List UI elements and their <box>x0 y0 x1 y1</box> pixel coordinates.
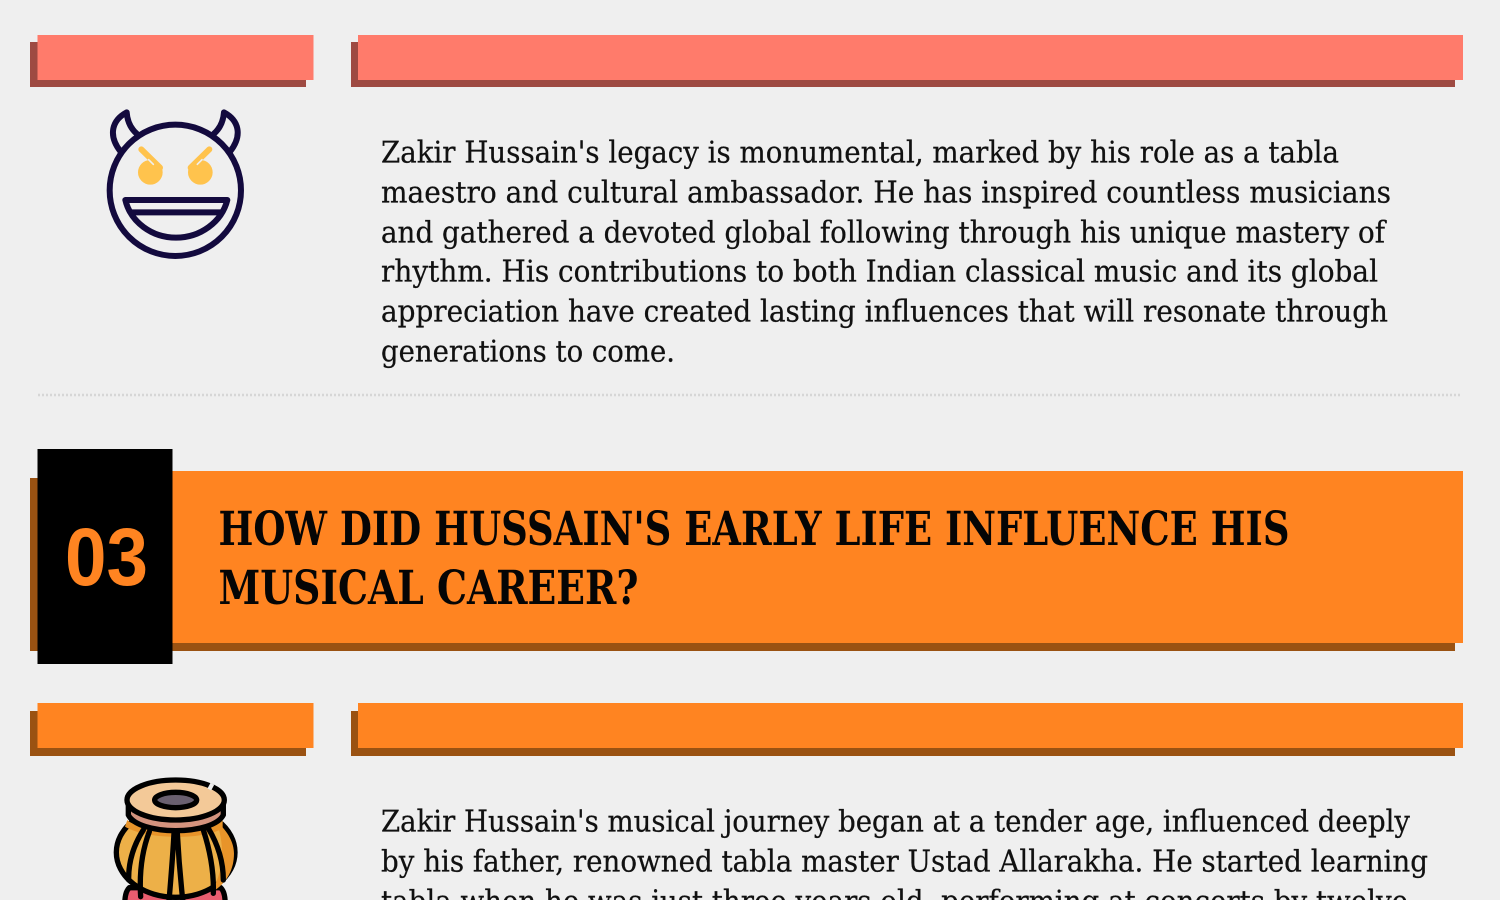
number block: 03 <box>65 512 148 603</box>
body text: early life: Zakir Hussain's musical journey began at a tender age, influenced deeply <box>381 804 1410 838</box>
body text: legacy <box>381 136 1391 368</box>
right salmon header bar <box>351 35 1463 87</box>
body text: legacy: rhythm. His contributions to both Indian classical music and its global <box>381 254 1378 288</box>
body text: legacy: appreciation have created lasting influences that will resonate through <box>381 294 1388 328</box>
left salmon header bar <box>30 35 314 87</box>
left orange header bar <box>30 703 314 756</box>
body text: early life: by his father, renowned tabla master Ustad Allarakha. He started learning <box>381 844 1428 878</box>
body text: early life <box>381 804 1428 900</box>
heading: MUSICAL CAREER? <box>218 560 638 615</box>
icon: tabla drum <box>116 780 235 900</box>
body text: legacy: and gathered a devoted global following through his unique mastery of <box>381 216 1387 250</box>
question banner 03 <box>30 449 1463 664</box>
body text: legacy: generations to come. <box>381 334 675 368</box>
icon: devil face <box>110 112 241 256</box>
body text: legacy: maestro and cultural ambassador. He has inspired countless musicians <box>381 176 1391 210</box>
number block <box>38 449 172 664</box>
heading <box>218 501 1290 615</box>
body text: legacy: Zakir Hussain's legacy is monumental, marked by his role as a tabla <box>381 136 1339 170</box>
right orange header bar <box>351 703 1463 756</box>
